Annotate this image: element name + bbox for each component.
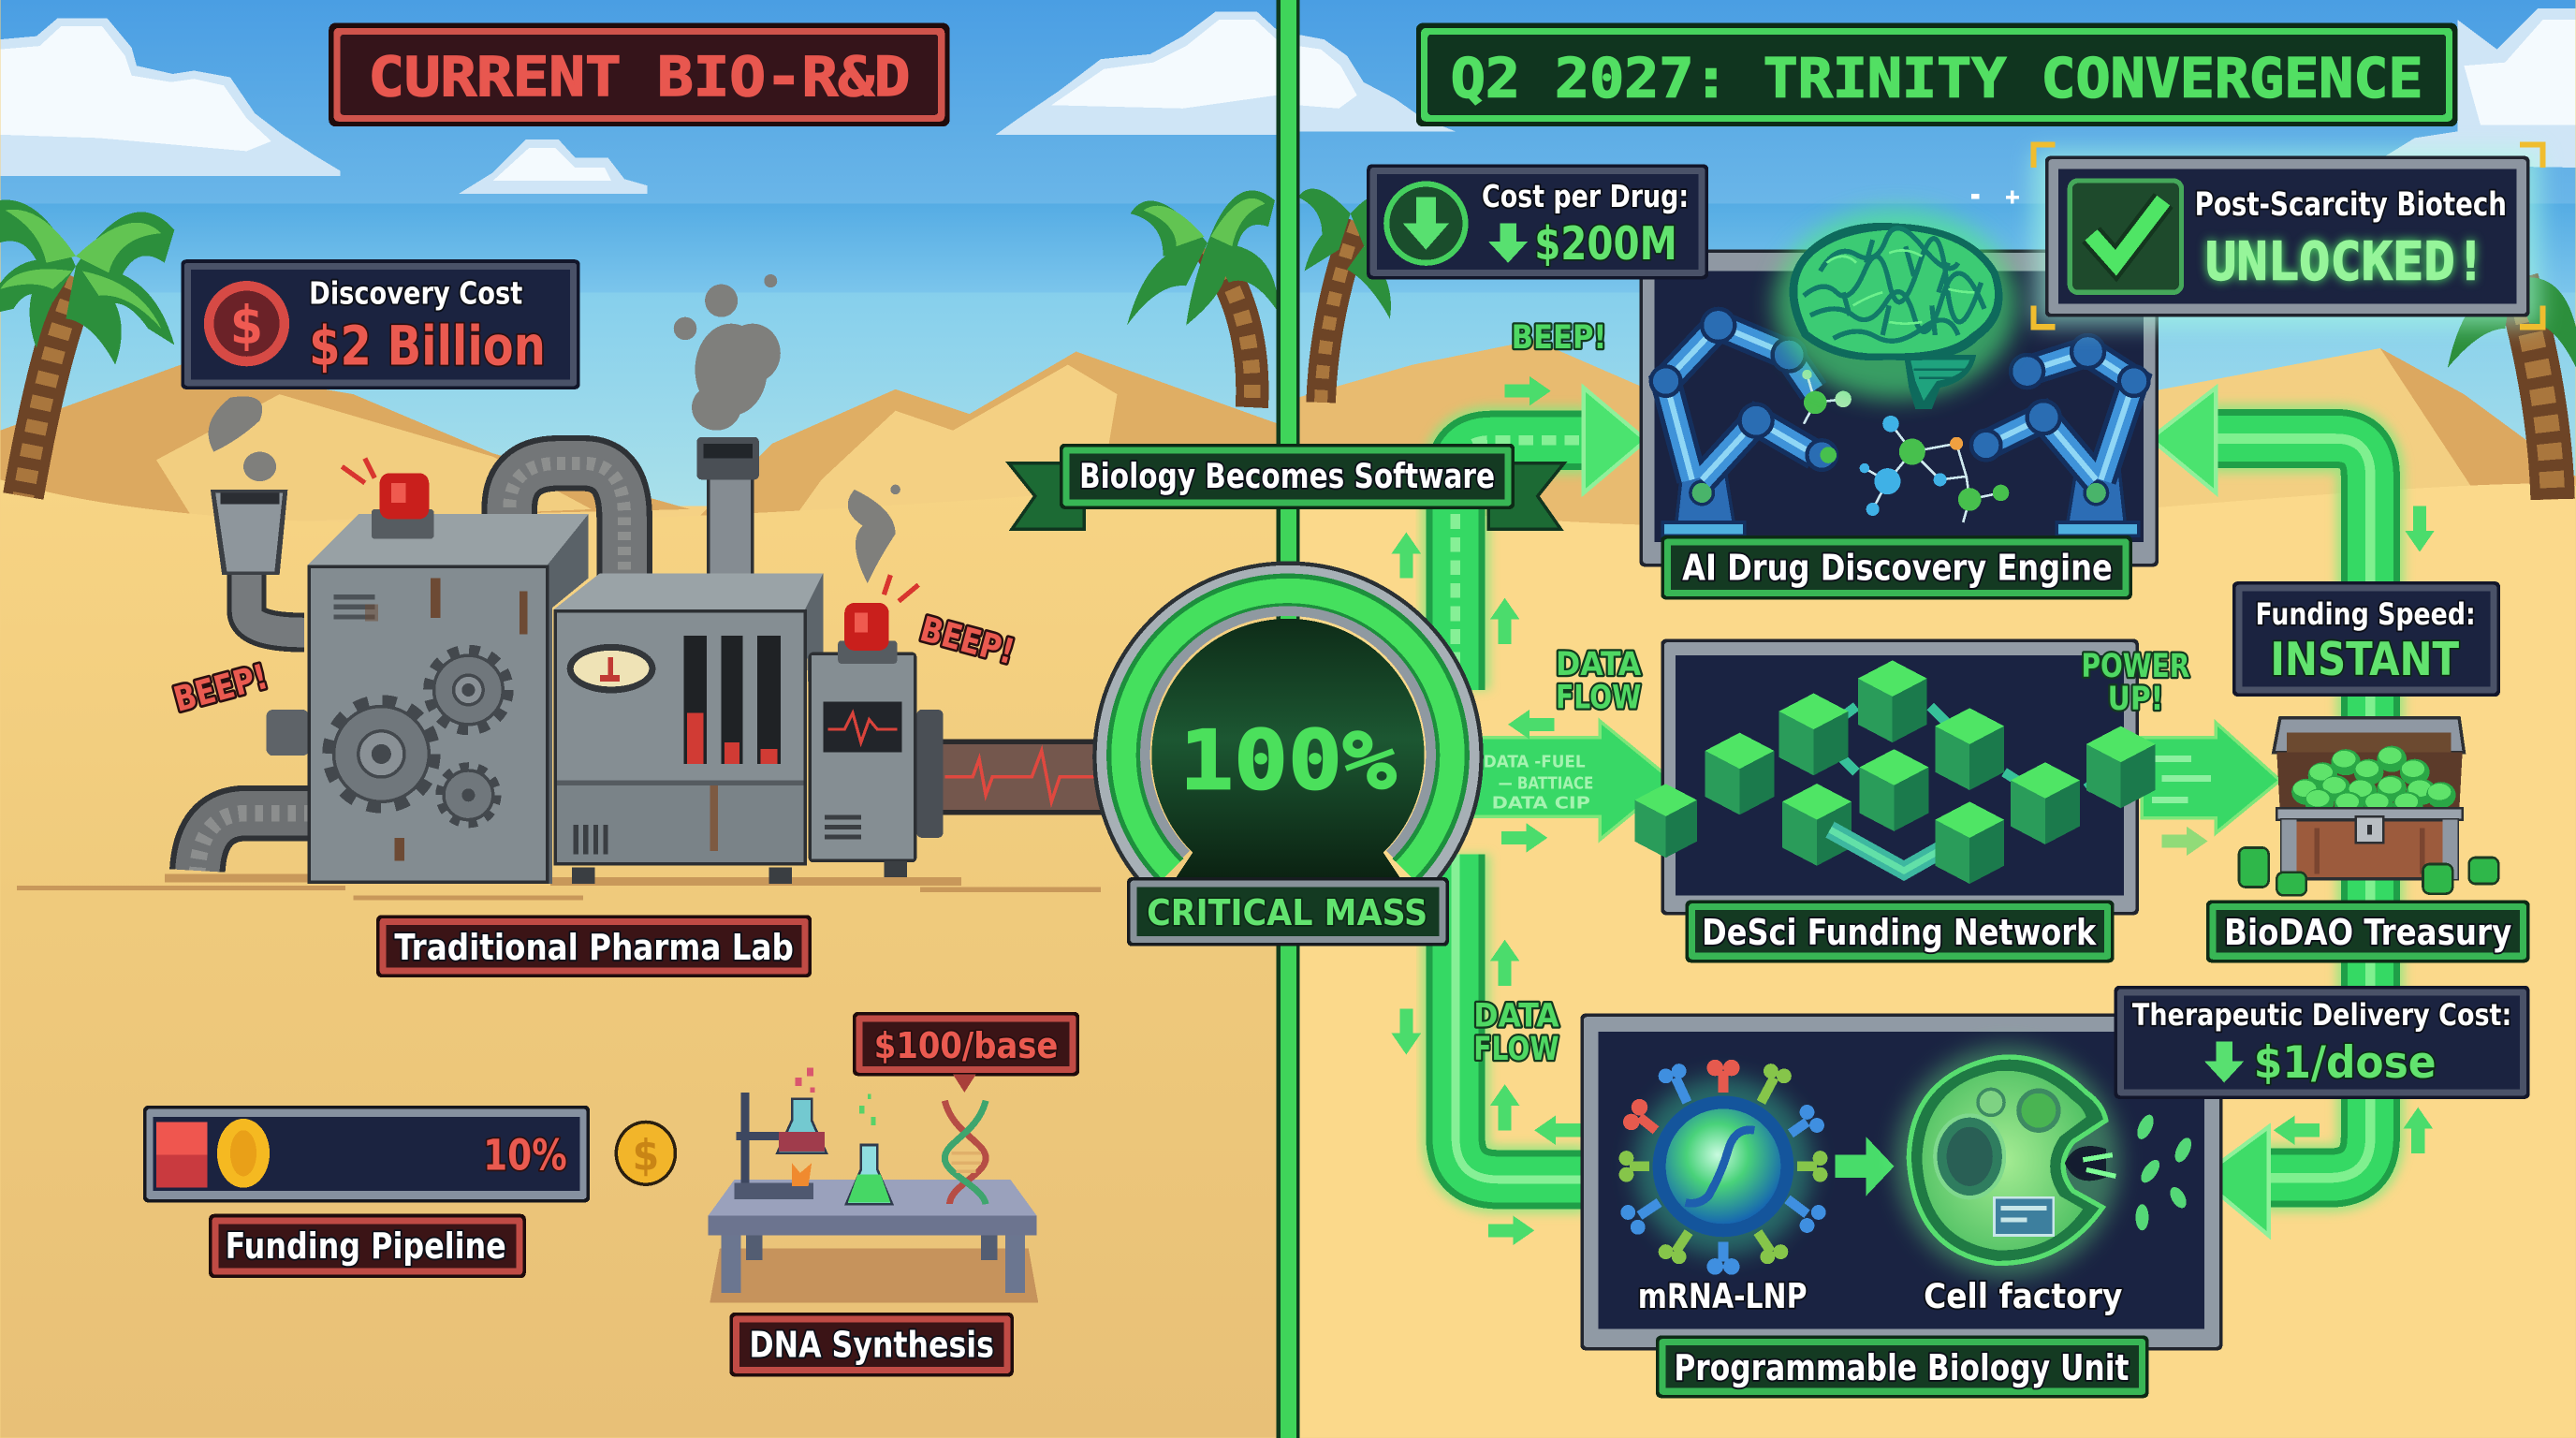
- callout: $100/base: $100/base: [874, 1025, 1058, 1067]
- arrow: lnp to cell: [1835, 1137, 1894, 1196]
- gears: [329, 651, 508, 823]
- arrow: to desci funding network: DATA CIP: [1492, 794, 1590, 813]
- arrow: to desci funding network: [1471, 721, 1673, 840]
- icon: down arrow in circle: [1386, 184, 1466, 263]
- panel: programmable biology unit: mRNA-LNP: [1638, 1276, 1807, 1316]
- label: traditional pharma lab: [376, 915, 812, 977]
- bottom left pipe: [198, 710, 313, 871]
- title: current bio-r&d: CURRENT BIO-R&D: [368, 45, 910, 109]
- machine: traditional pharma lab: [198, 437, 918, 884]
- callout: $100/base: [853, 1012, 1079, 1093]
- label: ai drug discovery engine: [1661, 536, 2132, 599]
- red level bars: [683, 636, 781, 764]
- green flask: [846, 1094, 892, 1204]
- icon: dollar coin: $: [230, 296, 263, 357]
- robot arms: [1651, 309, 2148, 479]
- data flow label upper: DATA: [1556, 645, 1642, 683]
- palm tree: far right: [2448, 213, 2576, 499]
- data flow label lower: DATA: [1473, 997, 1559, 1035]
- banner: biology becomes software: Biology Becomes Software: [1079, 456, 1495, 496]
- connector tube with heartbeat: [916, 710, 1118, 838]
- data flow label upper: FLOW: [1556, 678, 1641, 716]
- lab table with flasks: [709, 1068, 1038, 1302]
- left cabinet: [307, 514, 588, 884]
- label: biodao treasury: [2206, 901, 2530, 962]
- panel: programmable biology unit: Cell factory: [1924, 1276, 2122, 1316]
- panel: therapeutic delivery cost: [2115, 986, 2530, 1099]
- small flow arrows: [1392, 376, 2435, 1245]
- clouds: left sky: [0, 11, 1277, 194]
- icon: mrna-lnp particle: [1619, 1060, 1827, 1275]
- label: dna synthesis: DNA Synthesis: [749, 1324, 994, 1366]
- arrow: to biodao treasury: [2142, 723, 2280, 833]
- alarm light right: [838, 575, 918, 664]
- panel: cost per drug: $200M: [1534, 216, 1677, 271]
- sparkles: [1971, 191, 2019, 204]
- title: current bio-r&d: [329, 23, 950, 126]
- smoke puffs: [209, 274, 900, 583]
- icon: dollar coin: [204, 281, 289, 366]
- alarm light left: [342, 459, 434, 539]
- panel: therapeutic delivery cost: Therapeutic Delivery Cost:: [2132, 999, 2511, 1033]
- label: desci funding network: [1686, 901, 2115, 962]
- beep label green: BEEP!: [1512, 318, 1606, 357]
- label: dna synthesis: [729, 1313, 1014, 1376]
- label: programmable biology unit: [1656, 1336, 2148, 1398]
- coins beside chest: [2239, 847, 2498, 895]
- icon: coin in bar: [217, 1119, 270, 1188]
- panel: therapeutic delivery cost: $1/dose: [2254, 1037, 2437, 1089]
- clouds: right sky: [1298, 8, 2576, 168]
- divider line: [1277, 0, 1299, 1438]
- chimney: [696, 437, 759, 575]
- power up label: UP!: [2108, 680, 2163, 718]
- blockchain cubes: [1634, 660, 2155, 884]
- green pipe: to programmable biology unit: [1456, 854, 1586, 1180]
- gauge: 100% critical mass: 100%: [1179, 712, 1397, 808]
- small cabinet with monitor: [809, 653, 916, 877]
- released particles: [2134, 1112, 2195, 1230]
- label: ai drug discovery engine: AI Drug Discovery Engine: [1682, 547, 2113, 589]
- panel: post-scarcity biotech unlocked: Post-Scarcity Biotech: [2195, 185, 2507, 224]
- title: q2 2027 trinity convergence: Q2 2027: TRINITY CONVERGENCE: [1451, 47, 2423, 110]
- panel: cost per drug: [1367, 164, 1708, 279]
- green pipe: return loop from programmable unit to ai engine: [2150, 388, 2370, 1236]
- molecules: [1802, 370, 2009, 522]
- funding progress bar: [143, 1106, 590, 1202]
- green coins in chest: [2291, 746, 2456, 818]
- icon: glowing brain: [1774, 209, 2017, 409]
- title: q2 2027 trinity convergence: [1416, 23, 2457, 126]
- dna helix: [944, 1101, 986, 1204]
- label: critical mass: [1127, 877, 1449, 946]
- panel: funding speed: [2232, 581, 2500, 697]
- data flow label lower: [1473, 997, 1559, 1068]
- banner: biology becomes software: [1009, 444, 1564, 529]
- funding progress bar: 10%: [483, 1130, 567, 1180]
- icon: treasure chest: [2239, 718, 2498, 895]
- label: desci funding network: DeSci Funding Network: [1702, 912, 2097, 954]
- arrow: to desci funding network: — BATTIACE: [1499, 774, 1593, 793]
- beep label right: BEEP!: [916, 609, 1018, 672]
- panel: cost per drug: Cost per Drug:: [1482, 178, 1689, 214]
- panel: desci funding network: [1634, 639, 2155, 915]
- icon: check mark: [2070, 181, 2182, 292]
- palm tree: right of divider: [1298, 189, 1399, 403]
- panel: funding speed: INSTANT: [2270, 632, 2459, 686]
- flask on burner: [735, 1068, 827, 1199]
- arch pipe: [509, 463, 624, 583]
- panel: programmable biology unit: [1580, 1014, 2222, 1350]
- red filled portion: [156, 1122, 207, 1188]
- beep label left: BEEP!: [169, 656, 272, 720]
- palm tree: left of divider: [1127, 190, 1278, 407]
- label: funding pipeline: [209, 1214, 526, 1278]
- panel: post-scarcity biotech unlocked: UNLOCKED!: [2205, 231, 2486, 292]
- panel: ai drug discovery engine: [1640, 250, 2159, 566]
- panel: post-scarcity biotech unlocked: [2034, 144, 2543, 327]
- power up label: POWER: [2082, 647, 2189, 685]
- label: funding pipeline: Funding Pipeline: [226, 1225, 506, 1268]
- label: critical mass: CRITICAL MASS: [1147, 892, 1427, 934]
- gauge: 100% critical mass: [1104, 573, 1472, 946]
- label: biodao treasury: BioDAO Treasury: [2224, 912, 2512, 954]
- arrow: to desci funding network: DATA -FUEL: [1484, 753, 1586, 771]
- palm tree: far left: [0, 200, 174, 496]
- data flow label upper: [1556, 645, 1642, 716]
- middle cabinet: [554, 573, 823, 884]
- corner brackets: [2034, 144, 2543, 327]
- icon: gold dollar coin: $: [633, 1130, 659, 1180]
- panel: discovery cost: [181, 259, 580, 389]
- icon: cell factory: [1895, 1047, 2195, 1276]
- panel: discovery cost: $2 Billion: [309, 315, 546, 378]
- label: traditional pharma lab: Traditional Pharma Lab: [394, 927, 794, 969]
- robot arm bases: [1662, 468, 2139, 536]
- data flow label lower: FLOW: [1473, 1030, 1559, 1068]
- gauge dial: [567, 644, 655, 693]
- label: programmable biology unit: Programmable Biology Unit: [1674, 1347, 2129, 1389]
- power up label: [2082, 647, 2189, 718]
- panel: funding speed: Funding Speed:: [2256, 598, 2476, 632]
- icon: gold dollar coin: [615, 1121, 677, 1186]
- left funnel pipe: [211, 490, 304, 633]
- green pipe: to ai drug discovery engine: [1456, 388, 1647, 690]
- panel: discovery cost: Discovery Cost: [309, 275, 522, 312]
- ground dirt under machine: [17, 874, 1101, 901]
